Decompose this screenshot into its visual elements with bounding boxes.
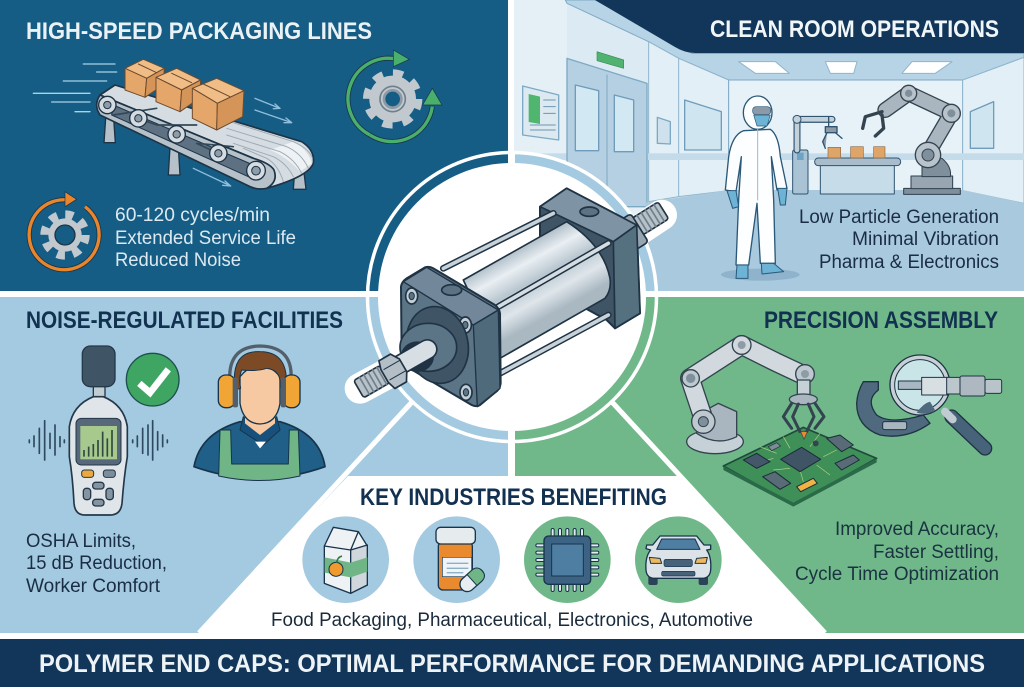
heading band: clean room operations: [595, 0, 1024, 53]
icon: gear with orange cycle arrow: [29, 192, 99, 270]
text: clean room benefits: Low Particle Generation: [799, 207, 999, 228]
panel: noise-regulated facilities: [0, 297, 508, 633]
text: precision benefits: [795, 519, 999, 585]
icon: medicine bottle and capsule: [413, 516, 500, 603]
text: precision benefits: Faster Settling,: [873, 542, 999, 563]
center badge: pneumatic cylinder: [354, 152, 669, 442]
panel: high-speed packaging lines: [0, 0, 508, 291]
heading: key industries benefiting: KEY INDUSTRIES BENEFITING: [360, 484, 667, 511]
panel: precision assembly: [515, 297, 1024, 633]
illustration: cylinder with end caps: [354, 188, 669, 407]
icon: gear with green cycle arrows: [348, 50, 442, 142]
text: noise benefits: OSHA Limits,: [26, 531, 136, 552]
text: high-speed benefits: Reduced Noise: [115, 250, 241, 271]
icon: car front: [635, 516, 722, 603]
text: clean room benefits: Minimal Vibration: [852, 229, 999, 250]
icon: circuit board: [723, 427, 877, 507]
illustration: clean room scene: [512, 0, 1024, 293]
text: noise benefits: [26, 531, 167, 597]
icon: green check badge: [126, 353, 179, 406]
text: precision benefits: Improved Accuracy,: [835, 519, 999, 540]
icon: microchip: [524, 516, 611, 603]
footer banner: POLYMER END CAPS: OPTIMAL PERFORMANCE FOR DEMANDING APPLICATIONS: [39, 650, 985, 678]
icon: micrometer under magnifier: [857, 355, 1002, 448]
panel: key industries benefiting: [199, 297, 825, 633]
text: clean room benefits: [799, 207, 999, 273]
text: noise benefits: 15 dB Reduction,: [26, 553, 167, 574]
icon: robotic arm: [682, 336, 824, 454]
text: precision benefits: Cycle Time Optimization: [795, 564, 999, 585]
heading: noise-regulated facilities: NOISE-REGULATED FACILITIES: [26, 307, 343, 334]
text: high-speed benefits: Extended Service Life: [115, 228, 296, 249]
icon: sound level meter: [29, 346, 167, 515]
icon: milk carton: [302, 516, 389, 603]
text: high-speed benefits: [115, 205, 296, 271]
text: key industries list: Food Packaging, Pharmaceutical, Electronics, Automotive: [271, 610, 753, 631]
panel: clean room operations: [512, 0, 1024, 293]
text: high-speed benefits: 60-120 cycles/min: [115, 205, 270, 226]
icon: worker with ear protection: [194, 346, 325, 480]
text: noise benefits: Worker Comfort: [26, 576, 161, 597]
footer banner: [0, 639, 1024, 687]
icon: conveyor belt with boxes: [33, 59, 314, 189]
heading: high-speed packaging lines: HIGH-SPEED PACKAGING LINES: [26, 18, 372, 45]
text: clean room benefits: Pharma & Electronics: [819, 252, 999, 273]
